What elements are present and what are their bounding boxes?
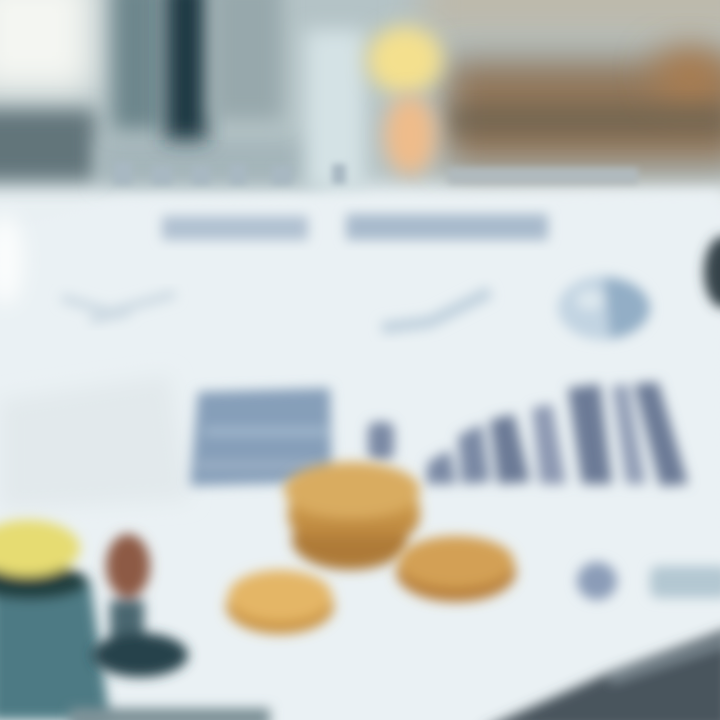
background: blurred city scene bbox=[0, 0, 720, 190]
lamp glow bbox=[367, 26, 443, 175]
icon: centre sketch bbox=[382, 292, 490, 328]
foreground: dark bottle bbox=[70, 534, 270, 720]
faint left document bbox=[0, 375, 190, 510]
blurred heading: line two bbox=[162, 214, 548, 240]
coin: right bbox=[396, 536, 516, 602]
foreground: teal cup with yellow lid bbox=[0, 520, 110, 720]
icon: small dot and label bbox=[577, 562, 720, 600]
chart: bar chart bbox=[368, 382, 688, 486]
icon: left sketch bbox=[62, 294, 175, 320]
coin: left bbox=[226, 570, 334, 634]
chart: blue panel bbox=[190, 388, 332, 486]
icon: dark shape at right edge bbox=[704, 236, 720, 308]
left bright edge bbox=[0, 215, 23, 305]
paper sheet bbox=[0, 192, 720, 720]
blurred heading: line one bbox=[114, 162, 638, 184]
coins: stack bbox=[284, 462, 420, 570]
foreground: dark laptop corner bbox=[480, 628, 720, 720]
icon: pie chart bbox=[558, 276, 650, 340]
